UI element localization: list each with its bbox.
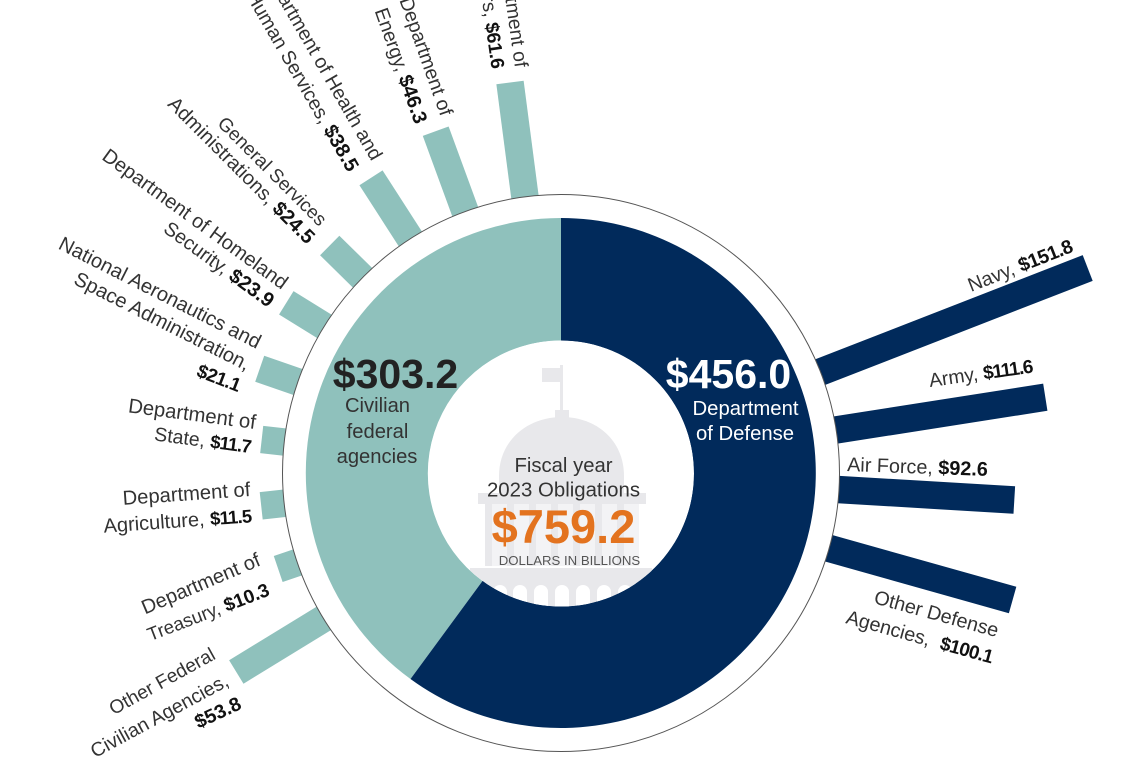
label: veterans affairs bbox=[460, 0, 532, 70]
label: treasury bbox=[138, 549, 272, 646]
center total: $759.2 bbox=[492, 500, 635, 553]
label: other defense agencies: Other Defense bbox=[872, 587, 1001, 642]
center label: fiscal year: Fiscal year bbox=[514, 455, 613, 477]
donut: civilian share bbox=[306, 218, 561, 679]
label: other defense agencies: Agencies, $100.1 bbox=[844, 607, 996, 669]
label: homeland security: Department of Homeland bbox=[98, 145, 292, 294]
label: energy: Energy, $46.3 bbox=[370, 5, 431, 127]
label: general services: General Services bbox=[213, 113, 330, 231]
label: homeland security: Security, $23.9 bbox=[159, 217, 278, 312]
center unit note: DOLLARS IN BILLIONS bbox=[499, 553, 640, 568]
label: general services: Administrations, $24.5 bbox=[163, 93, 319, 249]
label: state: State, $11.7 bbox=[153, 423, 253, 458]
label: nasa: Space Administration, bbox=[70, 268, 254, 375]
center label: obligations: 2023 Obligations bbox=[487, 480, 640, 502]
radial bars: civilian agencies bbox=[236, 82, 561, 672]
heading: civilian total: $303.2 bbox=[333, 351, 458, 397]
label: agriculture: Agriculture, $11.5 bbox=[103, 505, 253, 538]
label: other federal civilian agencies: $53.8 bbox=[191, 693, 245, 733]
label: treasury: Treasury, $10.3 bbox=[144, 579, 272, 646]
label: treasury: Department of bbox=[138, 549, 264, 619]
text: civilian federal agencies: Civilian bbox=[345, 395, 410, 417]
label: energy bbox=[370, 0, 457, 127]
text: department of defense: Department bbox=[693, 398, 799, 420]
label: state bbox=[127, 395, 258, 458]
heading: defense total: $456.0 bbox=[666, 351, 791, 397]
text: civilian federal agencies: federal bbox=[347, 421, 408, 443]
label: state: Department of bbox=[127, 395, 258, 434]
label: other federal civilian agencies: Other Federal bbox=[106, 644, 219, 720]
donut: defense share bbox=[410, 218, 816, 728]
icon: capitol building bbox=[428, 340, 694, 610]
label: agriculture: Department of bbox=[122, 479, 251, 510]
label: other federal civilian agencies: Civilian Agencies, bbox=[87, 670, 232, 760]
label: air force: Air Force, $92.6 bbox=[847, 454, 988, 481]
label: agriculture bbox=[103, 479, 253, 538]
label: nasa: National Aeronautics and bbox=[55, 233, 264, 353]
radial bars: department of defense bbox=[561, 268, 1088, 600]
text: department of defense bbox=[693, 398, 799, 445]
text: civilian federal agencies bbox=[337, 395, 417, 468]
text: department of defense: of Defense bbox=[696, 423, 794, 445]
label: navy: Navy, $151.8 bbox=[965, 235, 1076, 297]
text: civilian federal agencies: agencies bbox=[337, 446, 417, 468]
label: nasa: $21.1 bbox=[194, 361, 244, 397]
outer ring bbox=[282, 194, 840, 752]
label: army: Army, $111.6 bbox=[928, 356, 1034, 392]
